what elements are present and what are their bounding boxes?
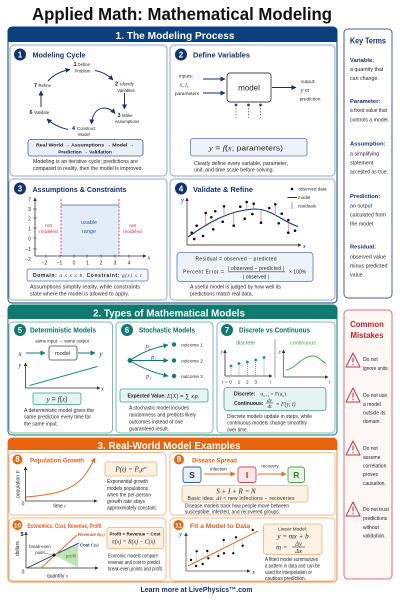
term: assumption: Assumption: (350, 142, 385, 148)
regression chart: y (178, 532, 182, 538)
equations box: = F(a (269, 390, 283, 398)
constraint chart: 2 (100, 260, 103, 266)
model diagram: prediction (300, 96, 321, 102)
mistake 4: validation. (363, 534, 386, 540)
branching diagram (128, 342, 203, 380)
common mistakes heading: Mistakes (351, 331, 384, 340)
model diagram: inputs: (179, 74, 193, 80)
branching diagram: p (146, 373, 149, 380)
input output diagram: same input → same output (35, 338, 90, 344)
caption: guaranteed result. (129, 426, 169, 432)
panel 7: discrete vs continuous (217, 322, 335, 434)
equation box (190, 138, 307, 156)
cycle diagram: Refine (38, 83, 52, 88)
panel 1: modeling cycle (10, 45, 167, 176)
caption (265, 557, 320, 582)
cycle diagram: Construct (77, 126, 96, 131)
equations box: Discrete: (234, 392, 256, 398)
panel 4: validate and refine: Validate & Refine (193, 185, 253, 194)
mistake 4: without (363, 525, 379, 531)
constraint chart: 1 (28, 226, 31, 232)
caption (24, 408, 94, 428)
break-even chart: quantity x (47, 574, 69, 580)
line chart: y (18, 363, 22, 369)
caption: Disease models track how people move between (185, 504, 289, 510)
footer: Learn more at LivePhysics™.com (140, 585, 253, 594)
cycle diagram: 2 (115, 82, 118, 88)
break-even chart: Cost C(x) (80, 542, 99, 548)
panel 9: disease spread: 9 (177, 455, 182, 464)
residual formula box: Percent Error = (183, 270, 224, 276)
branching diagram: 3 (149, 376, 151, 380)
mistake 1: Do not (363, 357, 378, 363)
term: parameter: controls a model. (350, 118, 389, 124)
SIR diagram: recovery (261, 464, 279, 468)
cycle diagram: Validate (34, 110, 50, 115)
term: residual: value. (350, 272, 364, 278)
caption (108, 554, 163, 572)
caption (190, 284, 282, 298)
growth chart: 0 (22, 502, 25, 508)
process chain box: Prediction → Validation (58, 149, 112, 155)
scatter chart: y (180, 197, 184, 204)
break-even chart: Revenue R(x) (78, 532, 106, 537)
legend: model (298, 195, 310, 200)
model diagram: parameters (175, 91, 200, 97)
term: variable: can change. (350, 76, 379, 82)
expected value box: Expected Value: (128, 394, 166, 400)
mistake 4: predictions (363, 516, 388, 522)
linear model box: y = mx + b (276, 532, 309, 540)
formula box (105, 462, 157, 476)
cycle diagram: Variables (117, 88, 135, 93)
cycle diagram: 3 (118, 113, 121, 119)
term: assumption: a simplifying (350, 152, 379, 158)
equations box: dt (267, 404, 272, 410)
branching diagram: p (146, 343, 149, 350)
caption: continuous models change smoothly (227, 420, 307, 426)
constraint chart (25, 198, 151, 266)
term: residual: observed value (350, 254, 386, 260)
SIR equation box (182, 486, 308, 502)
caption: approximately constant. (107, 506, 157, 512)
input output diagram: x (17, 350, 22, 358)
term: prediction (350, 194, 387, 228)
panel 7: discrete vs continuous: 7 (225, 326, 230, 335)
discrete chart: 1 (238, 380, 241, 386)
caption (107, 479, 157, 512)
constraint chart: 0 (73, 260, 76, 266)
continuous chart: y (278, 349, 282, 355)
caption: when the per-person (107, 492, 151, 498)
panel 1: modeling cycle: Modeling Cycle (32, 50, 86, 60)
caption (129, 406, 196, 432)
discrete chart: 3 (254, 380, 257, 386)
mistake 4 (346, 502, 389, 540)
term: variable: Variable: (350, 58, 374, 64)
constraint chart: modeled (123, 229, 142, 235)
cycle diagram: Problem (74, 68, 91, 74)
panel 11: fit a model to data: 11 (175, 522, 182, 530)
caption: Exponential growth (107, 479, 148, 485)
residual formula box: Residual = observed − predicted (196, 256, 277, 262)
model diagram: output: (301, 79, 315, 85)
SIR diagram: R (293, 470, 299, 480)
term: assumption: statement (350, 160, 374, 166)
discrete chart: y (220, 349, 224, 355)
panel 3: assumptions and constraints: 3 (18, 184, 23, 194)
caption: over time. (227, 428, 248, 434)
continuous chart (278, 340, 331, 386)
caption: the same input. (24, 422, 58, 428)
caption: A useful model is judged by how well its (190, 284, 282, 290)
panel 10: economics: Economics: Cost, Revenue, Profit (28, 524, 102, 530)
caption: A fitted model summarizes (265, 557, 318, 563)
mistake 2: Do not use (363, 393, 387, 399)
panel 11: fit a model to data (170, 518, 335, 582)
growth chart: population P (16, 470, 22, 498)
expected value box: E(X) = ∑ xᵢpᵢ (166, 394, 199, 400)
term: prediction: Prediction: (350, 194, 380, 200)
mistake 2: a model (363, 402, 381, 408)
caption (33, 159, 143, 172)
break-even chart: $ (20, 532, 24, 538)
break-even chart: profit (66, 554, 77, 560)
term: prediction: an output (350, 204, 373, 210)
break-even chart (15, 532, 106, 580)
branching diagram: 2 (154, 356, 156, 362)
cycle diagram: Define (78, 62, 91, 67)
term: parameter: a fixed value that (350, 108, 387, 114)
legend (288, 186, 327, 209)
term: residual (350, 244, 387, 278)
term: residual: minus predicted (350, 264, 387, 270)
caption: susceptible, infected, and recovered groups. (185, 510, 280, 516)
heading: section 3: 3. Real-World Model Examples (98, 440, 241, 452)
constraint chart: modeled (39, 229, 58, 235)
branching diagram: outcome 1 (181, 342, 203, 348)
regression chart: x (251, 570, 255, 576)
domain box: Domain: a ≤ x ≤ b, Constraint: g(x) ≤ c (33, 273, 143, 279)
caption: growth rate stays (107, 499, 145, 505)
equations box: n+1 (263, 394, 269, 398)
cycle diagram: Identify (120, 82, 135, 86)
caption (185, 504, 289, 516)
equations box: dy (267, 398, 273, 404)
panel 1: modeling cycle: 1 (18, 50, 23, 60)
branching diagram: 1 (149, 346, 151, 350)
panel 2: define variables: 2 (179, 50, 184, 60)
residual formula box: | observed | (243, 274, 269, 280)
cycle diagram: 7 (34, 83, 37, 89)
caption: same prediction every time for (24, 414, 91, 420)
caption: break-even points and profit. (108, 566, 163, 572)
mistake 3: proves (363, 472, 379, 478)
linear model box: Δx (294, 548, 302, 555)
mistake 2: outside its (363, 410, 386, 416)
break-even chart: dollars (15, 541, 21, 556)
constraint chart: −2 (25, 257, 31, 263)
break-even chart: break-even (29, 544, 51, 549)
discrete chart (220, 340, 272, 386)
panel 8: population growth: Population Growth (30, 458, 84, 464)
cycle diagram: Make (122, 113, 133, 118)
panel 8: population growth: 8 (15, 455, 20, 464)
term: prediction: calculated from (350, 212, 387, 218)
discrete chart: discrete (236, 340, 255, 346)
panel 6: stochastic models (116, 322, 213, 433)
caption: used for interpolation or (265, 570, 312, 576)
term: assumption (350, 142, 388, 176)
SIR equation box: Basic idea: ΔI ≈ new infections − recoveries (188, 496, 295, 502)
regression chart (178, 529, 258, 576)
section 3: real-world model examples (8, 438, 337, 582)
mistake 3: Do not (363, 446, 378, 452)
formula box: e (141, 466, 144, 474)
domain box (27, 269, 148, 281)
panel 5: deterministic models: Deterministic Models (30, 328, 96, 334)
SIR equation box: S + I + R = N (216, 488, 256, 496)
caption: outcomes instead of one (129, 420, 183, 426)
break-even chart: 0 (22, 570, 25, 576)
panel 6: stochastic models: Stochastic Models (139, 328, 195, 334)
constraint chart: 2 (28, 216, 31, 222)
section 2: types of mathematical models (8, 305, 337, 435)
caption: state where the model is allowed to apply. (30, 292, 129, 298)
panel 6: stochastic models: 6 (125, 326, 130, 335)
branching diagram: p (151, 354, 154, 361)
panel 8: population growth (9, 452, 166, 515)
model diagram: model (238, 84, 260, 92)
term: parameter (350, 99, 389, 124)
equations box: a (260, 392, 264, 398)
caption: unit, and time scale before solving. (194, 168, 274, 174)
equations box (224, 388, 326, 410)
constraint chart: not (45, 223, 52, 229)
constraint chart: not (129, 223, 136, 229)
discrete chart: t (222, 380, 224, 386)
equations box: ) (284, 390, 286, 398)
equation box: y = f(x; parameters) (208, 144, 284, 152)
constraint chart: 3 (28, 207, 31, 213)
panel 4: validate and refine: 4 (179, 184, 184, 194)
constraint chart: −1 (57, 260, 63, 266)
legend: observed data (298, 186, 327, 192)
continuous chart: continuous (290, 340, 316, 346)
branching diagram: outcome 2 (181, 358, 203, 364)
caption: Assumptions simplify reality, while constraints (30, 284, 141, 290)
constraint chart: usable (81, 220, 97, 226)
caption: A deterministic model gives the (24, 408, 94, 414)
panel 5: deterministic models (9, 322, 112, 433)
profit formula box: π(x) = R(x) − C(x) (112, 538, 155, 546)
discrete chart: t (270, 380, 272, 386)
SIR diagram: infection (210, 466, 227, 472)
input output diagram (17, 338, 103, 360)
heading: section 1: 1. The Modeling Process (116, 30, 235, 42)
profit formula box (107, 528, 164, 548)
cycle diagram: Model (78, 132, 90, 137)
panel 10: economics (9, 518, 166, 581)
key terms heading: Key Terms (350, 36, 387, 46)
mistake 2: domain. (363, 419, 381, 425)
panel 10: economics: 10 (14, 522, 21, 530)
SIR diagram: S (189, 470, 195, 480)
cycle diagram: 1 (74, 62, 77, 68)
term: variable (350, 58, 384, 82)
constraint chart: −1 (25, 247, 31, 253)
equations box: = F(y, t) (276, 401, 296, 408)
scatter chart: x (302, 244, 306, 250)
constraint chart: range (82, 229, 96, 235)
SIR diagram: I (246, 470, 248, 480)
common mistakes heading: Common (350, 320, 384, 329)
caption: cautious prediction. (265, 576, 306, 582)
mistake 3: correlation (363, 464, 387, 470)
residual formula box: × 100% (289, 270, 307, 276)
constraint chart: 7 (28, 198, 31, 204)
growth chart: time t (53, 504, 66, 510)
caption (30, 284, 141, 298)
model diagram (175, 73, 321, 118)
cycle diagram: Assumptions (115, 119, 139, 124)
panel 7: discrete vs continuous: Discrete vs Continuous (239, 328, 310, 334)
caption (227, 414, 312, 434)
panel 5: deterministic models: 5 (18, 326, 23, 335)
panel 11: fit a model to data: Fit a Model to Data (190, 523, 250, 530)
caption: compared to reality, then the model is improved. (33, 166, 143, 172)
mistake 3: assume (363, 455, 381, 461)
term: assumption: accepted as true. (350, 170, 388, 176)
formula box: P(t) = P (115, 466, 139, 474)
mistake 4: Do not trust (363, 507, 389, 513)
expected value box (120, 389, 208, 402)
continuous chart: t (329, 380, 331, 386)
model diagram: x, t, (179, 82, 189, 88)
mistake 3: causation. (363, 481, 386, 487)
caption: models populations (107, 486, 148, 492)
caption: revenue and cost to predict (108, 560, 161, 566)
panel 3: assumptions and constraints (9, 179, 167, 300)
line chart: x (100, 386, 104, 392)
constraint chart: 3 (114, 260, 117, 266)
caption: A stochastic model includes (129, 406, 189, 412)
heading: section 2: 2. Types of Mathematical Models (93, 308, 245, 320)
line chart (18, 363, 104, 392)
equation box: y = f(x) (46, 396, 67, 404)
constraint chart: 1 (86, 260, 89, 266)
constraint chart: 4 (128, 260, 131, 266)
model diagram: y or (300, 88, 310, 94)
caption (194, 161, 288, 174)
term: parameter: Parameter: (350, 99, 380, 105)
panel 3: assumptions and constraints: Assumptions & Constraints (32, 185, 126, 194)
caption: a pattern in data and can be (265, 564, 320, 570)
input output diagram: y (98, 350, 103, 358)
term: variable: a quantity that (350, 67, 384, 73)
cycle diagram: 4 (72, 126, 76, 132)
mistake 1: ignore units. (363, 366, 389, 372)
scatter chart (180, 197, 306, 250)
constraint chart: x (147, 256, 151, 262)
formula box: 0 (139, 469, 141, 474)
caption: Discrete models update in steps, while (227, 414, 312, 420)
panel 9: disease spread: Disease Spread (192, 458, 237, 464)
branching diagram: outcome 3 (181, 374, 203, 379)
legend: residuals (298, 204, 317, 208)
break-even chart: point (35, 550, 45, 555)
cycle diagram (30, 62, 139, 137)
mistake 1 (346, 353, 389, 372)
term: residual: Residual: (350, 244, 376, 250)
constraint chart: 0 (28, 236, 31, 242)
caption: Economic models compare (108, 554, 158, 560)
mistake 2 (346, 388, 387, 425)
discrete chart: = 0 (225, 380, 232, 386)
equations box: Continuous: (234, 401, 264, 407)
equations box: n (282, 394, 284, 398)
panel 9: disease spread (170, 452, 335, 516)
cycle diagram: 6 (30, 110, 33, 116)
process chain box (28, 140, 143, 156)
linear model box: Δy (294, 540, 302, 548)
SIR diagram (183, 464, 304, 482)
panel 2: define variables: Define Variables (193, 50, 250, 60)
growth chart (16, 458, 97, 510)
linear model box: m = (276, 544, 288, 552)
panel 4: validate and refine (170, 179, 335, 300)
constraint chart: −2 (42, 260, 48, 266)
caption: randomness and predicts likely (129, 412, 196, 418)
residual formula box: | observed − predicted | (228, 266, 284, 272)
panel 2: define variables (170, 45, 335, 176)
mistake 3 (346, 441, 387, 487)
sidebar: common mistakes (344, 310, 392, 579)
title: Applied Math: Mathematical Modeling (32, 4, 332, 24)
linear model box (264, 524, 322, 555)
formula box: rt (144, 465, 147, 470)
process chain box: Real World → Assumptions → Model → (36, 143, 134, 149)
caption: Clearly define every variable, parameter, (194, 161, 288, 167)
input output diagram: model (55, 351, 70, 357)
caption: Modeling is an iterative cycle; predictions are (33, 159, 138, 165)
linear model box: Linear Model: (278, 526, 307, 532)
sidebar: key terms (344, 29, 392, 298)
discrete chart: 2 (246, 380, 249, 386)
section 1: the modeling process (8, 27, 337, 303)
common mistakes heading (350, 320, 384, 340)
term: prediction: the model. (350, 222, 375, 228)
residual formula box (177, 252, 313, 282)
caption: predictions match real data. (190, 292, 253, 298)
profit formula box: Profit = Revenue − Cost (110, 532, 161, 538)
